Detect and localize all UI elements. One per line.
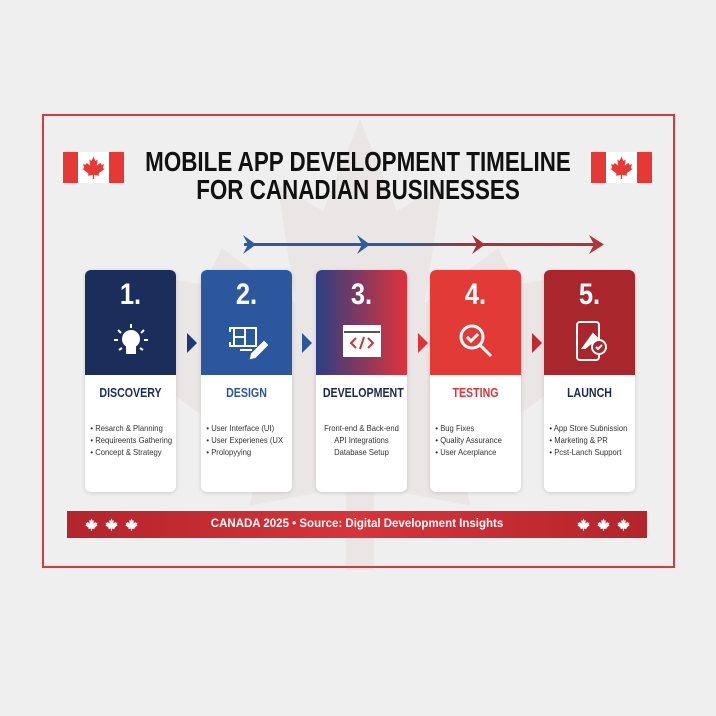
card 2: • Prolopyying (206, 447, 251, 457)
title: FOR CANADIAN BUSINESSES (196, 174, 520, 205)
arrow chevron 4 (532, 333, 542, 353)
card 4: TESTING (452, 386, 499, 400)
card 1: 1. (120, 278, 141, 311)
footer bar (67, 511, 647, 538)
card 2 (201, 270, 292, 492)
card 5: • Marketing & PR (549, 435, 608, 445)
card 1 (85, 270, 176, 492)
flag left (63, 152, 124, 183)
card 1: • Concept & Strategy (90, 447, 162, 457)
card 2: • User Experienes (UX (206, 435, 283, 445)
card 2: 2. (236, 278, 257, 311)
footer bar: CANADA 2025 • Source: Digital Development Insights (211, 518, 503, 530)
card 2: • User Interface (UI) (206, 423, 274, 433)
card 5 (544, 270, 635, 492)
card 1: • Resarch & Planning (90, 423, 163, 433)
card 1: • Requireents Gathering (90, 435, 172, 445)
flag right (591, 152, 652, 183)
card 3 (316, 270, 407, 492)
card 3: Front-end & Back-end (324, 423, 399, 433)
card 4: • Bug Fixes (435, 423, 474, 433)
arrow chevron 2 (302, 333, 312, 353)
card 3: 3. (351, 278, 372, 311)
card 2: DESIGN (226, 386, 267, 400)
title: MOBILE APP DEVELOPMENT TIMELINE (145, 146, 571, 177)
card 4: • User Acerplance (435, 447, 496, 457)
card 4: • Quality Assurance (435, 435, 502, 445)
card 5: • Pcst-Lanch Support (549, 447, 621, 457)
title (145, 146, 571, 205)
card 5: LAUNCH (567, 386, 612, 400)
card 3: Database Setup (334, 447, 389, 457)
card 3: DEVELOPMENT (323, 386, 404, 400)
card 5: 5. (579, 278, 600, 311)
card 4 (430, 270, 521, 492)
card 1: DISCOVERY (99, 386, 162, 400)
timeline arrow (243, 235, 604, 254)
frame (42, 114, 675, 568)
background maple leaf (176, 120, 544, 570)
card 4: 4. (465, 278, 486, 311)
card 5: • App Store Subnission (549, 423, 627, 433)
card 3: API Integrations (334, 435, 389, 445)
arrow chevron 1 (187, 333, 197, 353)
arrow chevron 3 (418, 333, 428, 353)
